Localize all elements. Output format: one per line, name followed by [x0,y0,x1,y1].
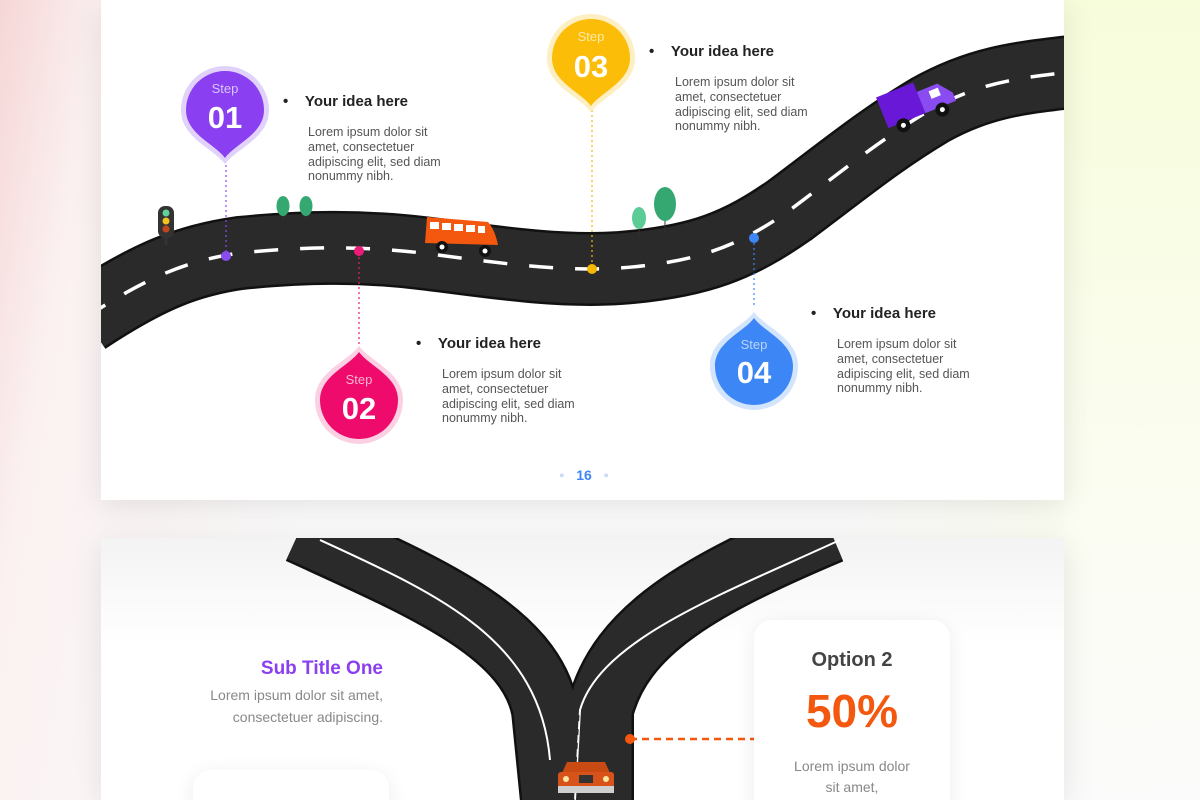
card: option 2: sit amet, [826,779,878,795]
icon: truck [876,70,960,137]
panel: top slide: Lorem ipsum dolor sit [442,367,562,381]
text: sub title one: consectetuer adipiscing. [233,709,383,725]
pin 04 [710,312,798,410]
panel: top slide: Lorem ipsum dolor sit [675,75,794,89]
icon: car [558,762,614,793]
panel: top slide: • Your idea here [811,305,936,322]
dotted connectors [226,110,754,345]
panel: bottom slide [101,538,1064,800]
panel: top slide [101,0,1064,500]
page number: ● 16 ● [559,467,609,483]
panel: top slide: Lorem ipsum dolor sit [837,337,956,351]
panel: top slide: • Your idea here [416,335,541,352]
card: option 2 [754,620,950,800]
pin 02: Step [346,372,372,387]
panel: top slide: amet, consectetuer [442,382,548,396]
road chart [101,14,1064,444]
icon: bus [425,217,498,257]
text block: step 04 [811,305,970,395]
card: option 2: Lorem ipsum dolor [794,758,910,774]
panel: top slide: adipiscing elit, sed diam [837,367,970,381]
panel: top slide: amet, consectetuer [837,352,943,366]
pin 03: Step [578,29,604,44]
icon: traffic light [158,206,174,245]
text block: step 01 [283,93,441,183]
text block: step 03 [649,43,808,133]
card: option 2: 50% [806,685,898,737]
pin 04: Step [741,337,767,352]
text block: step 02 [416,335,575,425]
panel: top slide: amet, consectetuer [675,90,781,104]
text: sub title one [210,658,383,725]
pin 03 [547,14,635,112]
panel: top slide: adipiscing elit, sed diam [308,155,441,169]
pin 02 [315,346,403,444]
panel: top slide: nonummy nibh. [837,381,922,395]
background glow right [1064,0,1200,800]
card: left [193,770,389,800]
dashed connector [625,734,755,744]
panel: top slide: adipiscing elit, sed diam [442,397,575,411]
pin 02: 02 [342,391,376,426]
card: option 2: Option 2 [811,649,893,671]
panel: top slide: adipiscing elit, sed diam [675,105,808,119]
pin 01: 01 [208,100,242,135]
pin 01 [181,66,269,164]
pin 03: 03 [574,49,608,84]
forked road [286,538,844,800]
panel: top slide: Lorem ipsum dolor sit [308,125,428,139]
panel: top slide: nonummy nibh. [442,411,527,425]
panel: top slide: nonummy nibh. [308,169,393,183]
panel: top slide: nonummy nibh. [675,119,760,133]
pin 01: Step [212,81,238,96]
text: sub title one: Lorem ipsum dolor sit amet, [210,687,383,703]
text: sub title one: Sub Title One [261,658,383,679]
panel: top slide: • Your idea here [649,43,774,60]
panel: top slide: amet, consectetuer [308,140,414,154]
panel: top slide: • Your idea here [283,93,408,110]
icon: trees [276,187,676,236]
pin 04: 04 [737,355,772,390]
